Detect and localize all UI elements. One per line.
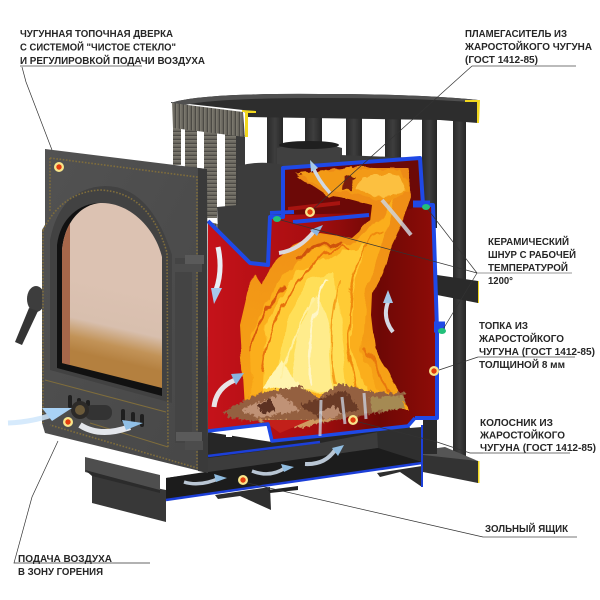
label: grate: КОЛОСНИК ИЗ	[480, 417, 553, 429]
label: door	[20, 28, 205, 67]
upper chamber	[283, 158, 423, 215]
label: air supply: В ЗОНУ ГОРЕНИЯ	[18, 566, 103, 578]
flue box and pipe	[217, 141, 420, 265]
label: ceramic cord	[488, 235, 576, 287]
markers: ceramic cord	[273, 204, 446, 334]
air regulator	[71, 401, 112, 420]
glass	[62, 203, 162, 388]
grate bars	[267, 105, 466, 470]
label: door: ЧУГУННАЯ ТОПОЧНАЯ ДВЕРКА	[20, 28, 173, 40]
glow below logs	[262, 420, 310, 433]
yellow edge marks	[242, 100, 480, 483]
arrows: ash chamber	[184, 445, 344, 484]
label: firebox: ЧУГУНА (ГОСТ 1412-85)	[479, 346, 595, 358]
ash box	[85, 422, 422, 522]
label: air supply: ПОДАЧА ВОЗДУХА	[18, 553, 112, 565]
label: grate: ЧУГУНА (ГОСТ 1412-85)	[480, 442, 596, 454]
ash chamber	[166, 425, 422, 500]
arrows: under logs	[320, 393, 366, 436]
arrow: left bottom	[214, 373, 244, 407]
door plate	[42, 149, 208, 473]
label: ceramic cord: КЕРАМИЧЕСКИЙ	[488, 235, 569, 248]
air flow arrows	[8, 160, 411, 484]
label: ash box: ЗОЛЬНЫЙ ЯЩИК	[485, 522, 569, 535]
blue cut lines	[166, 425, 422, 500]
label: ceramic cord: 1200°	[488, 275, 513, 287]
label: door: И РЕГУЛИРОВКОЙ ПОДАЧИ ВОЗДУХА	[20, 54, 205, 67]
rear convection grate	[171, 94, 480, 483]
label: flame damper	[464, 28, 592, 66]
firebox red wall	[208, 158, 437, 442]
cast iron cross-section outline	[208, 158, 445, 441]
arrow: out of door	[80, 420, 143, 432]
ash box feet	[215, 487, 271, 510]
firebox cutaway	[208, 158, 437, 442]
label: firebox: ТОЛЩИНОЙ 8 мм	[479, 358, 565, 371]
label: ceramic cord: ШНУР С РАБОЧЕЙ	[488, 248, 576, 261]
label: flame damper: ПЛАМЕГАСИТЕЛЬ ИЗ	[465, 28, 567, 40]
markers: orange dots	[54, 162, 439, 485]
right base	[423, 452, 478, 483]
arrow: left top	[211, 247, 222, 304]
textured band and bars	[172, 103, 248, 252]
lower band	[437, 275, 478, 303]
leader lines	[14, 66, 577, 563]
burning logs	[222, 383, 405, 428]
label: flame damper: ЖАРОСТОЙКОГО ЧУГУНА	[464, 40, 592, 53]
hinges	[175, 255, 204, 450]
door	[15, 149, 208, 473]
decorative beading	[43, 158, 197, 468]
label: air supply	[18, 553, 112, 578]
ash box front lip	[92, 475, 166, 522]
label: door: С СИСТЕМОЙ "ЧИСТОЕ СТЕКЛО"	[20, 40, 176, 54]
label: grate	[479, 417, 596, 454]
label: firebox: ЖАРОСТОЙКОГО	[478, 332, 564, 345]
flames	[222, 168, 411, 433]
air vents	[68, 395, 144, 427]
label: firebox: ТОПКА ИЗ	[479, 320, 528, 332]
arrow: into door	[8, 408, 72, 423]
label: grate: ЖАРОСТОЙКОГО	[479, 428, 565, 442]
label: ceramic cord: ТЕМПЕРАТУРОЙ	[488, 261, 568, 274]
arrow: right	[383, 290, 393, 332]
curved top band	[171, 94, 478, 123]
label: firebox	[478, 320, 595, 371]
label: flame damper: (ГОСТ 1412-85)	[465, 54, 538, 66]
black window recess	[57, 203, 162, 396]
arrows: upper chamber	[279, 160, 411, 253]
door handle	[15, 286, 45, 345]
hinge column	[175, 258, 192, 443]
arch frame	[50, 186, 172, 403]
flame streaks	[250, 230, 395, 400]
grate opening highlights	[226, 432, 232, 437]
